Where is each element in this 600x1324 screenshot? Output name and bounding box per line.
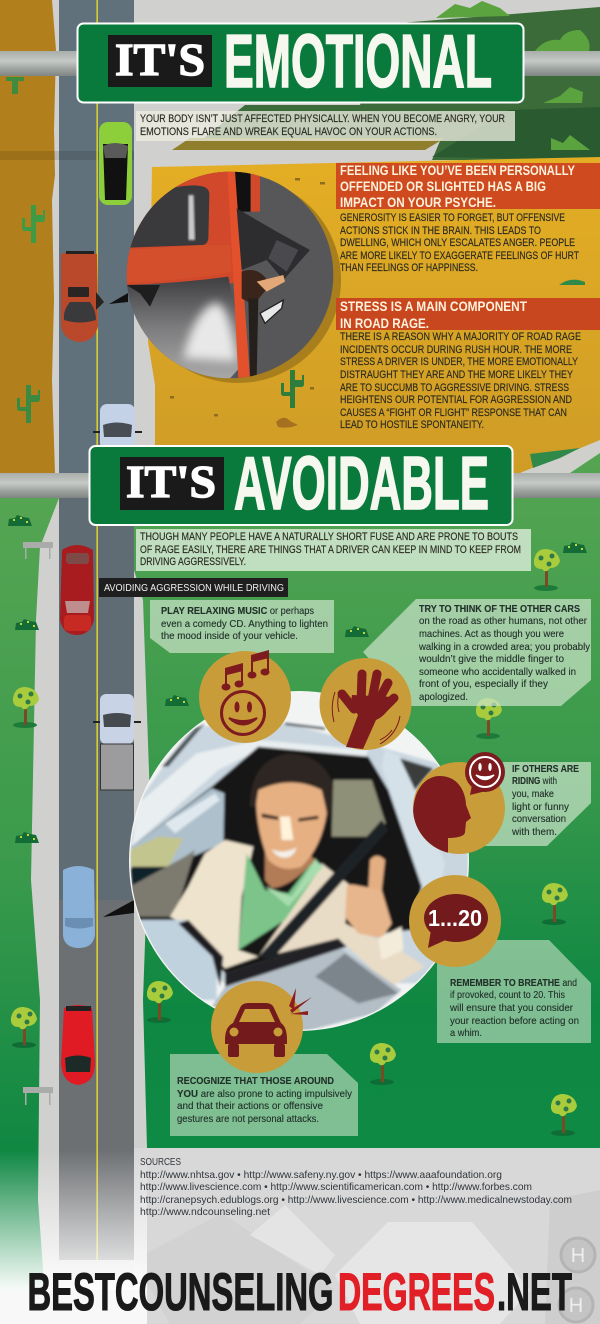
footer logo: BESTCOUNSELING [28,1263,334,1322]
text block: generosity: ACTIONS STICK IN THE BRAIN. THIS LEADS TO [340,225,541,237]
sign: It's Avoidable [90,441,512,525]
heading bar: stress [336,298,600,331]
tip box: breathe [437,940,591,1043]
background: white foot [0,1290,147,1324]
intro box: emotional: YOUR BODY ISN’T JUST AFFECTED PHYSICALLY. WHEN YOU BECOME ANGRY, YOUR [140,113,505,125]
small bush on panel [559,280,585,285]
cactus [17,385,40,423]
illustration: angry driver leaning out of red car [127,172,333,378]
sources: http://www.ndcounseling.net [140,1207,270,1218]
tip box: recognize: YOU are also prone to acting impulsively [177,1089,353,1100]
background: left green field [0,498,59,1324]
background: road [0,0,134,1260]
heading bar: personally offended: OFFENDED OR SLIGHTED HAS A BIG [340,179,546,194]
tip box: others riding: RIDING with [512,776,557,787]
pole: second sign [0,473,600,498]
icon: head with speech bubble [413,752,505,856]
tip box: relaxing music: PLAY RELAXING MUSIC or perhaps [161,606,314,617]
heading bar: stress: IN ROAD RAGE. [340,316,429,331]
trees [11,549,577,1136]
tip box: other cars: on the road as other humans, not other [419,616,587,627]
photo: smiling driver giving thumbs up [125,690,475,1040]
heading bar: personally offended: IMPACT ON YOUR PSYCHE. [340,195,496,210]
icon: honking car [211,981,312,1073]
intro box: avoidable [136,529,531,571]
intro box: avoidable: THOUGH MANY PEOPLE HAVE A NATURALLY SHORT FUSE AND ARE PRONE TO BOUTS [140,531,518,543]
background: top right hills [172,1,600,160]
sources [140,1157,572,1218]
badge text: IT'S [126,456,216,507]
tip box: other cars [363,599,591,706]
bushes [8,515,587,843]
background: left verge desert end [0,473,52,498]
background: desert strip [0,0,56,473]
cactus [281,370,304,408]
tip box: others riding: with them. [511,827,557,838]
background: bottom buildings: H [571,1245,585,1267]
tip box: other cars: walking in a crowded area; you probably [418,642,591,653]
cactus [22,205,45,243]
text block: generosity [340,212,579,274]
desert rock [276,418,298,428]
badge text: IT'S [115,34,205,85]
tip box: recognize: and that their actions or offensive [177,1101,323,1112]
car: light blue pickup [93,404,142,450]
tip box: other cars: TRY TO THINK OF THE OTHER CARS [419,604,580,615]
tip box: others riding: light or funny [512,802,570,813]
icon: waving hand [320,658,412,750]
tip box: others riding: conversation [512,814,566,825]
pointer: circle to car [109,293,128,304]
sign badge [108,35,212,87]
car: orange-red with driver [61,251,104,342]
tip box: relaxing music [150,600,334,653]
icon: count to twenty: 1...20 [428,905,482,931]
icon: count to twenty [409,875,501,967]
intro box: emotional [136,111,515,141]
small desert marks [170,178,325,416]
intro box: avoidable: OF RAGE EASILY, THERE ARE THINGS THAT A DRIVER CAN KEEP IN MIND TO KEEP FROM [140,544,521,556]
desert bush [530,448,580,468]
footer logo: DEGREES [338,1263,495,1322]
background: fade at page bottom [0,1150,147,1290]
text block: stress [340,331,581,431]
tip box: others riding [470,762,591,846]
tip box: recognize [170,1054,358,1136]
tip box: other cars: apologized. [419,692,468,703]
background: bottom buildings: H [569,1295,583,1317]
car: dark red [60,545,94,635]
road signs [23,542,53,1105]
label: avoiding aggression: AVOIDING AGGRESSION WHILE DRIVING [104,583,284,594]
icon: music and smile [199,650,291,743]
car: white pickup [93,694,141,790]
tip box: other cars: someone who accidentally walked in [419,667,576,678]
tip box: breathe: will ensure that you consider [449,1003,574,1014]
car: blue van [63,866,95,948]
intro box: avoidable: DRIVING AGGRESSIVELY. [140,556,246,568]
pole: top sign [0,51,600,76]
tip box: others riding: IF OTHERS ARE [512,764,579,775]
circle shadow [135,177,341,383]
sources: http://cranepsych.edublogs.org • http://www.livescience.com • http://www.medicalnewstoday.com [140,1195,572,1206]
sign badge [120,457,224,510]
text block: generosity: THAN FEELINGS OF HAPPINESS. [340,262,478,274]
cactus [6,77,24,94]
tip box: breathe: a whim. [450,1028,482,1039]
tip box: others riding: you, make [512,789,554,800]
car: bright red [61,1005,95,1085]
tip box: relaxing music: the mood inside of your vehicle. [161,631,298,642]
sign: It's Emotional [78,19,524,103]
tip box: recognize: RECOGNIZE THAT THOSE AROUND [177,1076,334,1087]
background: yellow desert panel [148,157,600,473]
car: green [99,122,132,205]
tip box: other cars: front of you, especially if they [419,679,549,690]
sources: http://www.livescience.com • http://www.scientificamerican.com • http://www.forbes.com [140,1182,532,1193]
background: green field [134,450,600,1148]
background: bottom buildings [134,1148,600,1324]
tip box: relaxing music: even a comedy CD. Anything to lighten [161,619,328,630]
background: diagonal road corner [520,440,600,473]
text block: stress: LEAD TO HOSTILE SPONTANEITY. [340,419,484,431]
label: avoiding aggression [99,578,288,597]
heading bar: stress: STRESS IS A MAIN COMPONENT [340,299,528,314]
intro box: emotional: EMOTIONS FLARE AND WREAK EQUAL HAVOC ON YOUR ACTIONS. [140,126,437,138]
pointer: photo to car [103,900,134,917]
sources: http://www.nhtsa.gov • http://www.safeny.ny.gov • https://www.aaafoundation.org [140,1170,502,1181]
tip box: recognize: gestures are not personal attacks. [177,1114,319,1125]
sources: SOURCES [140,1157,181,1168]
tip box: breathe: your reaction before acting on [450,1016,579,1027]
tip box: other cars: machines. Act as though you were [419,629,564,640]
tip box: breathe: REMEMBER TO BREATHE and [450,978,577,989]
heading bar: personally offended [336,163,600,210]
tip box: other cars: wouldn’t give the middle finger to [418,654,564,665]
tip box: breathe: if provoked, count to 20. This [450,990,565,1001]
